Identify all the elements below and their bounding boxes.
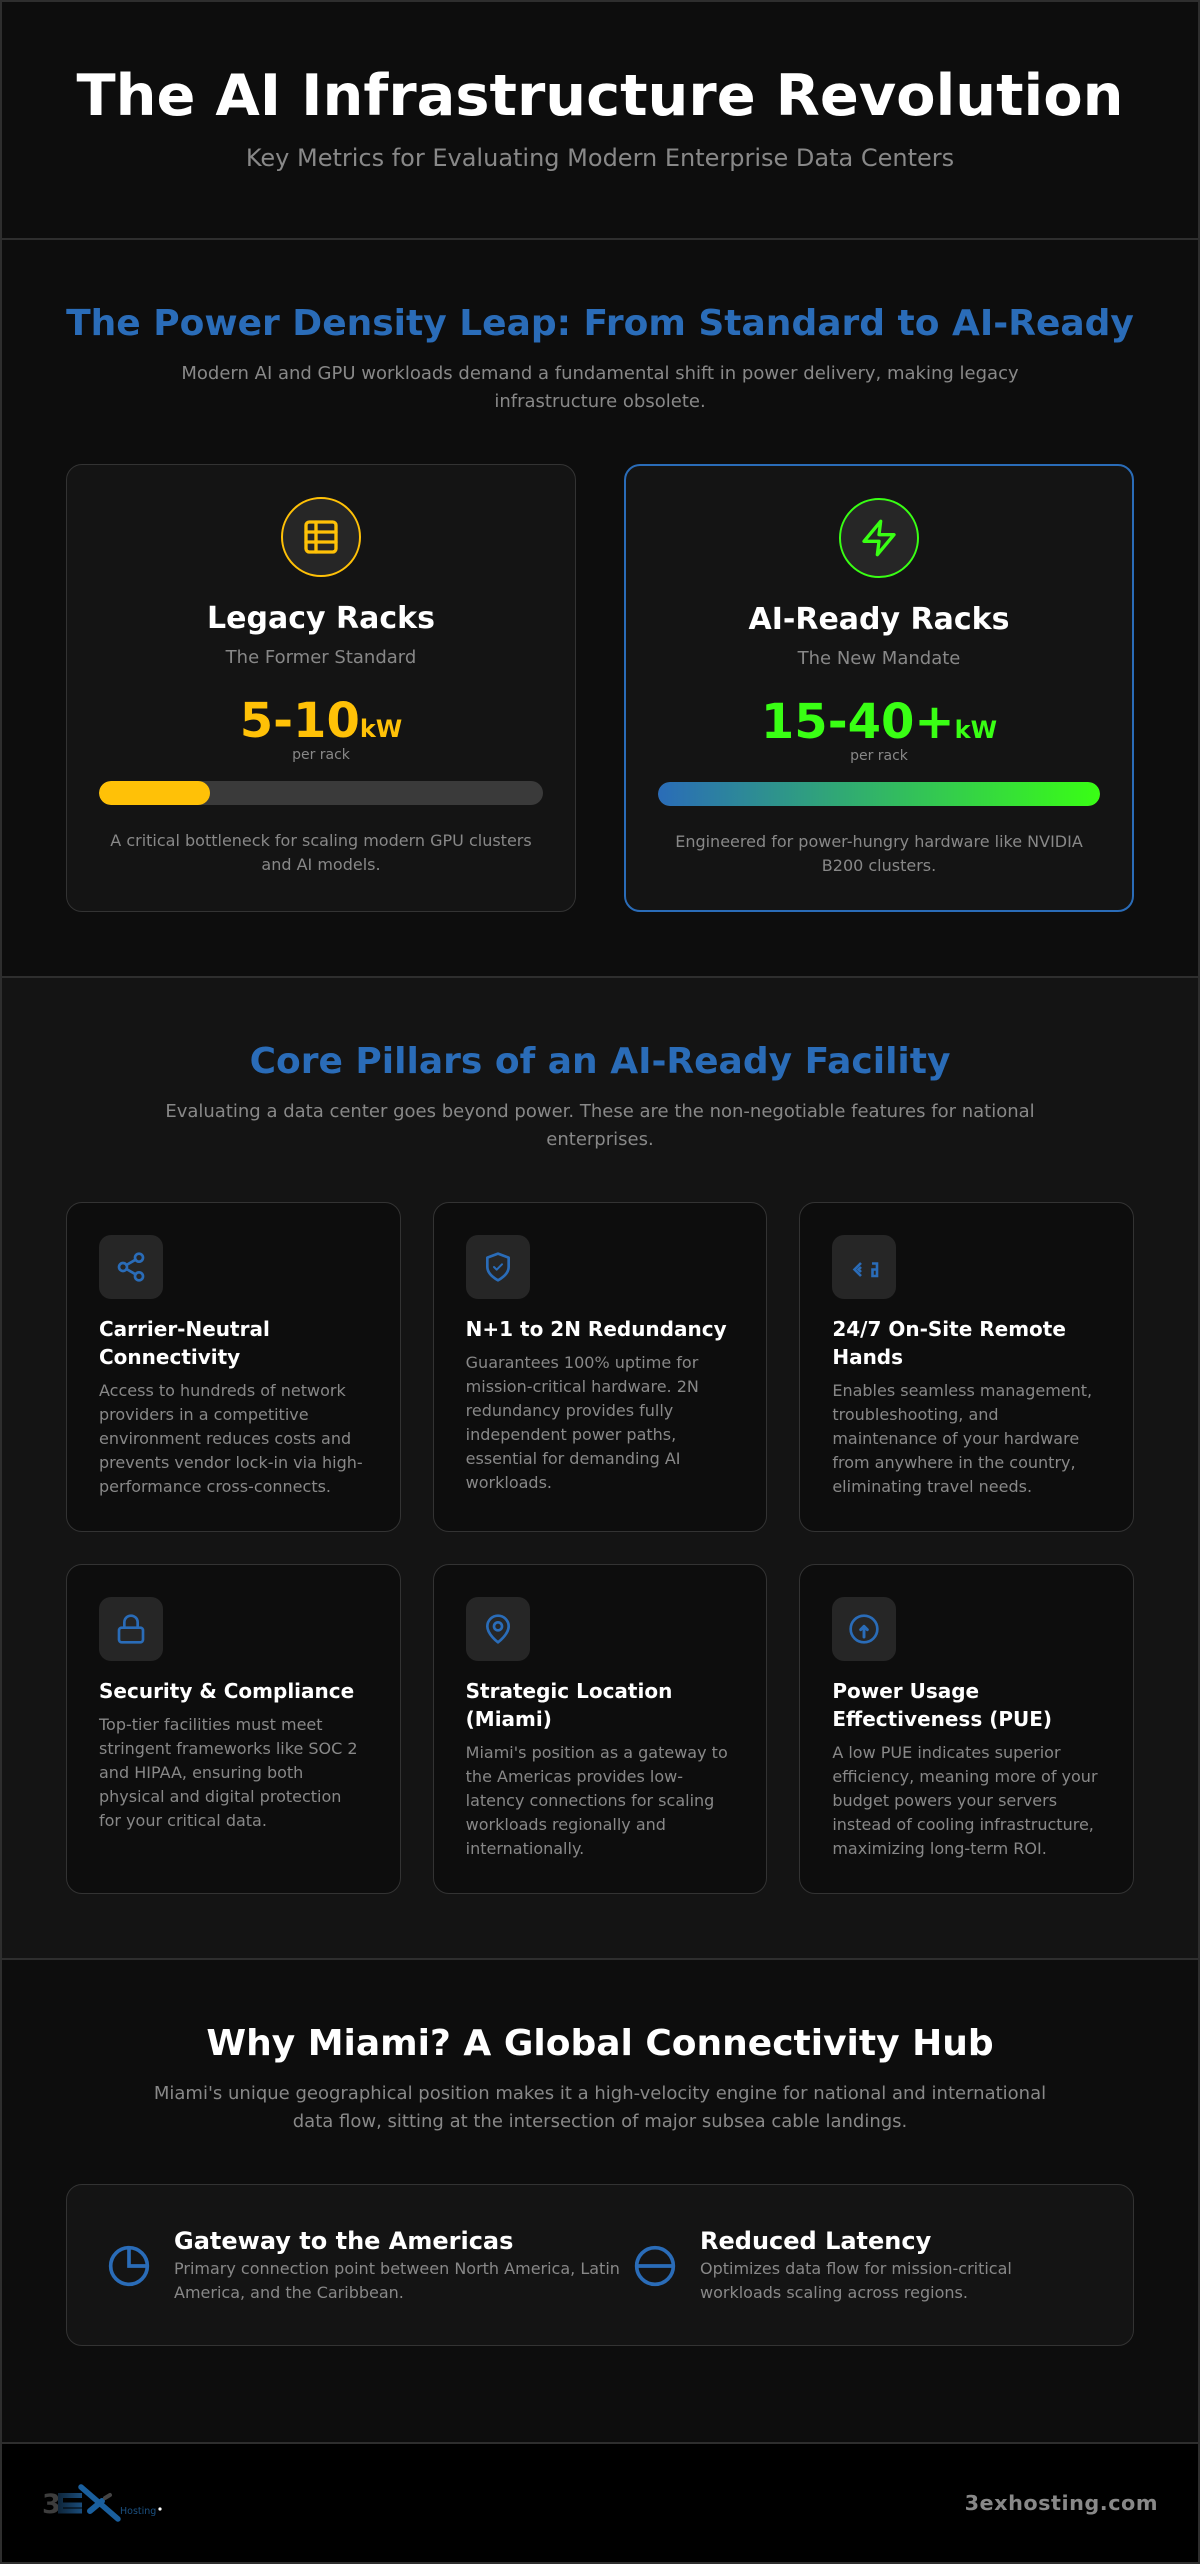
panel: miami benefits <box>66 2184 1134 2346</box>
benefit text: workloads scaling across regions. <box>700 2283 968 2302</box>
footer <box>0 2444 1200 2564</box>
progress bar: 25 percent <box>99 781 543 805</box>
text: carrier-neutral connectivity: performance cross-connects. <box>99 1477 331 1496</box>
text: power usage effectiveness: efficiency, meaning more of your <box>832 1767 1098 1786</box>
icon: lightning bolt <box>839 498 919 578</box>
benefit text <box>700 2259 1012 2302</box>
benefit: reduced latency <box>700 2227 1012 2302</box>
heading: core pillars: Core Pillars of an AI-Ready Facility <box>250 1040 950 1082</box>
icon: share nodes <box>99 1235 163 1299</box>
text: 24/7 on-site remote hands: Hands <box>832 1345 903 1369</box>
text: 24/7 on-site remote hands: maintenance of your hardware <box>832 1429 1079 1448</box>
icon: circled arrow <box>832 1597 896 1661</box>
panel: power density section <box>0 240 1200 978</box>
card: power usage effectiveness <box>799 1564 1134 1894</box>
text: security and compliance: stringent frameworks like SOC 2 <box>99 1739 358 1758</box>
card description: ai-ready <box>675 832 1083 875</box>
metric caption: per rack: per rack <box>292 746 350 762</box>
text: power usage effectiveness <box>832 1679 1098 1858</box>
benefit: gateway to the americas <box>174 2227 620 2302</box>
header band <box>0 0 1200 240</box>
section intro: why miami: data flow, sitting at the intersection of major subsea cable landings. <box>293 2111 907 2132</box>
section intro: power density: infrastructure obsolete. <box>494 391 706 412</box>
section intro: core pillars <box>165 1101 1035 1150</box>
text: n+1 to 2n redundancy: workloads. <box>466 1473 552 1492</box>
text: carrier-neutral connectivity: environment reduces costs and <box>99 1429 351 1448</box>
text: carrier-neutral connectivity: providers in a competitive <box>99 1405 309 1424</box>
text: strategic location: (Miami) <box>466 1707 552 1731</box>
card description: legacy: and AI models. <box>261 855 381 874</box>
text: n+1 to 2n redundancy: mission-critical hardware. 2N <box>466 1377 699 1396</box>
card description: legacy: A critical bottleneck for scaling modern GPU clusters <box>110 831 532 850</box>
benefit title: Gateway to the Americas <box>174 2227 513 2255</box>
text: power usage effectiveness: Power Usage <box>832 1679 979 1703</box>
card subtitle: the new mandate: The New Mandate <box>798 648 960 669</box>
text: security and compliance: physical and digital protection <box>99 1787 341 1806</box>
section intro: core pillars: Evaluating a data center goes beyond power. These are the non-negotiable features for national <box>165 1101 1035 1122</box>
logo: 3EX Hosting: 3 <box>42 2489 61 2520</box>
text: strategic location: internationally. <box>466 1839 584 1858</box>
text: security and compliance: for your critical data. <box>99 1811 267 1830</box>
panel: why miami section <box>0 1960 1200 2444</box>
section intro: power density <box>181 363 1019 412</box>
text: n+1 to 2n redundancy: Guarantees 100% uptime for <box>466 1353 698 1372</box>
heading: why miami: Why Miami? A Global Connectivity Hub <box>206 2022 994 2064</box>
website address: 3exhosting.com <box>965 2491 1158 2515</box>
section intro: why miami: Miami's unique geographical position makes it a high-velocity engine for national and international <box>154 2083 1046 2104</box>
section intro: core pillars: enterprises. <box>546 1129 654 1150</box>
text: power usage effectiveness: maximizing long-term ROI. <box>832 1839 1047 1858</box>
text: strategic location: latency connections for scaling <box>466 1791 714 1810</box>
metric: 15-40+ kW: 15-40+kW <box>761 694 997 750</box>
card description: legacy <box>110 831 532 874</box>
text: n+1 to 2n redundancy: essential for demanding AI <box>466 1449 680 1468</box>
text: power usage effectiveness: Effectiveness (PUE) <box>832 1707 1052 1731</box>
text: n+1 to 2n redundancy: redundancy provides fully <box>466 1401 673 1420</box>
text: n+1 to 2n redundancy <box>466 1317 727 1492</box>
subtitle: Key Metrics for Evaluating Modern Enterprise Data Centers <box>246 144 954 172</box>
text: 24/7 on-site remote hands: 24/7 On-Site Remote <box>832 1317 1066 1341</box>
progress bar: full gradient <box>658 782 1100 806</box>
text: carrier-neutral connectivity: Connectivity <box>99 1345 240 1369</box>
card title: ai-ready racks: AI-Ready Racks <box>749 602 1009 637</box>
card: carrier-neutral connectivity <box>66 1202 401 1532</box>
icon: pie gateway <box>108 2246 150 2286</box>
text: carrier-neutral connectivity: Access to hundreds of network <box>99 1381 346 1400</box>
text: strategic location <box>466 1679 728 1858</box>
icon: padlock <box>99 1597 163 1661</box>
card: security and compliance <box>66 1564 401 1894</box>
text: carrier-neutral connectivity: Carrier-Neutral <box>99 1317 270 1341</box>
metric caption: per rack: per rack <box>850 748 908 764</box>
benefit title: Reduced Latency <box>700 2227 931 2255</box>
panel: ai-ready racks card <box>624 464 1134 912</box>
card description: ai-ready: Engineered for power-hungry hardware like NVIDIA <box>675 832 1083 851</box>
card: 24/7 on-site remote hands <box>799 1202 1134 1532</box>
panel: core pillars section <box>0 978 1200 1960</box>
section intro: why miami <box>154 2083 1046 2132</box>
section intro: power density: Modern AI and GPU workloads demand a fundamental shift in power delivery, making legacy <box>181 363 1019 384</box>
card title: legacy racks: Legacy Racks <box>207 601 435 636</box>
text: n+1 to 2n redundancy: N+1 to 2N Redundancy <box>466 1317 727 1341</box>
text: strategic location: workloads regionally and <box>466 1815 666 1834</box>
text: 24/7 on-site remote hands: Enables seamless management, <box>832 1381 1092 1400</box>
logo: 3EX Hosting <box>42 2484 162 2522</box>
benefit text: America, and the Caribbean. <box>174 2283 404 2302</box>
text: 24/7 on-site remote hands <box>832 1317 1092 1496</box>
text: strategic location: Miami's position as a gateway to <box>466 1743 728 1762</box>
benefit text: Optimizes data flow for mission-critical <box>700 2259 1012 2278</box>
logo: 3EX Hosting: Hosting <box>120 2506 156 2517</box>
card subtitle: the former standard: The Former Standard <box>226 647 416 668</box>
text: security and compliance: Top-tier facilities must meet <box>99 1715 323 1734</box>
icon: location pin <box>466 1597 530 1661</box>
text: carrier-neutral connectivity <box>99 1317 363 1496</box>
text: carrier-neutral connectivity: prevents vendor lock-in via high- <box>99 1453 363 1472</box>
text: strategic location: the Americas provides low- <box>466 1767 683 1786</box>
text: security and compliance: Security & Compliance <box>99 1679 354 1703</box>
icon: shield check <box>466 1235 530 1299</box>
icon: remote hands glyph <box>832 1235 896 1299</box>
benefit text <box>174 2259 620 2302</box>
metric: 5-10 kW: 5-10kW <box>240 693 402 749</box>
text: 24/7 on-site remote hands: eliminating travel needs. <box>832 1477 1032 1496</box>
text: strategic location: Strategic Location <box>466 1679 672 1703</box>
panel: legacy racks card <box>66 464 576 912</box>
heading: power density: The Power Density Leap: From Standard to AI-Ready <box>66 302 1134 344</box>
benefit text: Primary connection point between North America, Latin <box>174 2259 620 2278</box>
card: n+1 to 2n redundancy <box>433 1202 767 1532</box>
title: The AI Infrastructure Revolution <box>76 62 1124 129</box>
text: security and compliance <box>98 1679 358 1830</box>
text: power usage effectiveness: A low PUE indicates superior <box>832 1743 1061 1762</box>
text: n+1 to 2n redundancy: independent power paths, <box>466 1425 676 1444</box>
text: power usage effectiveness: budget powers your servers <box>832 1791 1057 1810</box>
text: power usage effectiveness: instead of cooling infrastructure, <box>832 1815 1094 1834</box>
icon: rack table <box>281 497 361 577</box>
card: strategic location <box>433 1564 767 1894</box>
text: 24/7 on-site remote hands: from anywhere in the country, <box>832 1453 1076 1472</box>
text: security and compliance: and HIPAA, ensuring both <box>99 1763 303 1782</box>
text: 24/7 on-site remote hands: troubleshooting, and <box>832 1405 999 1424</box>
card description: ai-ready: B200 clusters. <box>822 856 936 875</box>
icon: globe latency <box>634 2246 676 2286</box>
